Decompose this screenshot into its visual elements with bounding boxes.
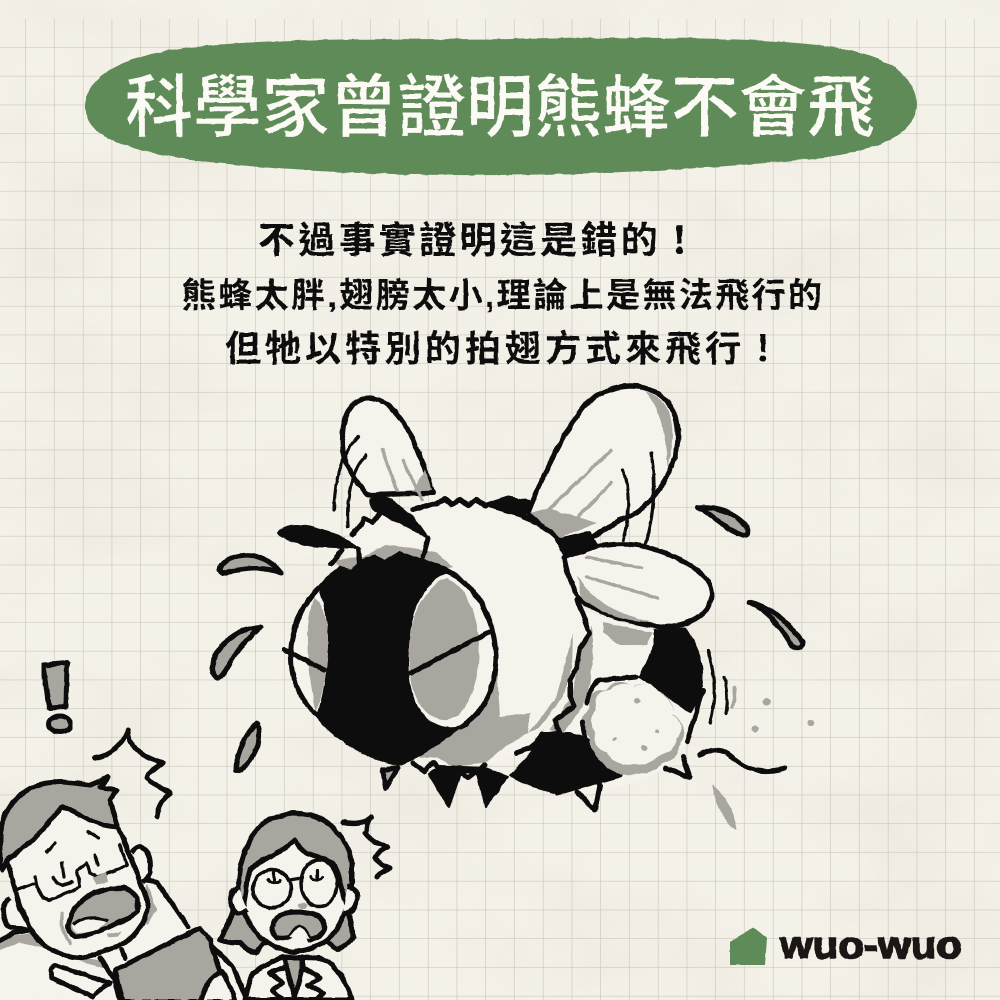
head and hair [0,777,150,958]
banner shape [85,38,917,175]
line 3: 但牠以特別的拍翅方式來飛行！ [225,328,781,369]
bumblebee illustration [212,386,814,830]
round glasses [253,860,337,909]
tablet and pen [50,928,235,1000]
mouth [272,912,325,940]
abdomen [510,610,703,793]
tuft [582,677,684,775]
front wing [556,532,712,627]
back right wing [528,386,678,563]
face [230,840,358,952]
scientist: man [0,777,247,1000]
left eye [285,590,328,715]
sweat drops [212,508,803,830]
subtitle text block [182,220,822,369]
surprise spikes: man [95,730,170,817]
head [285,545,496,765]
motion lines [700,650,814,771]
scientist: woman [220,813,358,1000]
right eye [408,572,496,727]
surprise spikes: woman [343,817,390,877]
title text: 科學家曾證明熊蜂不會飛 [125,70,875,146]
back left wing [334,398,433,527]
line 2: 熊蜂太胖,翅膀太小,理論上是無法飛行的 [182,277,822,315]
fangs and feet [382,757,690,810]
logo wordmark: wuo-wuo [779,925,962,967]
body [0,880,247,1000]
mouth [61,888,138,943]
icon: green house [730,927,767,965]
title banner [85,38,917,175]
line 1: 不過事實證明這是錯的！ [258,220,698,261]
exclamation mark [43,663,71,732]
hair [220,813,353,953]
body fur [340,497,590,767]
logo [730,925,962,967]
body [245,957,352,1000]
antennae [278,497,428,570]
glasses and eyes [15,832,127,900]
